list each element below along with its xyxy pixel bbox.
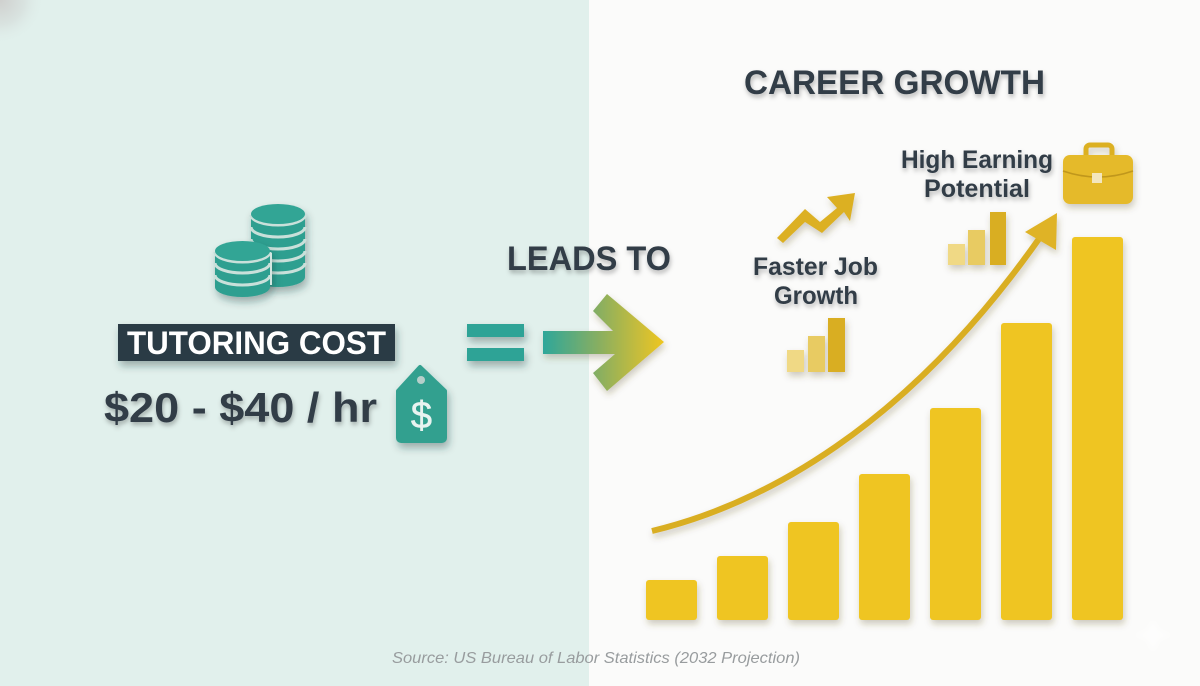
text: faster job growth — [753, 253, 878, 310]
back coin stack — [251, 204, 305, 287]
arrow: gradient — [543, 294, 664, 391]
icon: coin stacks — [215, 204, 305, 297]
text: high earning potential: Potential — [924, 175, 1030, 203]
icon: price tag: $ — [411, 395, 432, 437]
background: left panel — [0, 0, 589, 686]
front coin stack — [215, 241, 271, 297]
text: faster job growth: Faster Job — [753, 253, 878, 281]
bar chart — [646, 237, 1123, 620]
icon: small bars, high earning — [948, 212, 1006, 265]
source note: Source: US Bureau of Labor Statistics (2032 Projection) — [392, 650, 800, 667]
equals sign — [467, 324, 524, 361]
heading: leads to: LEADS TO — [507, 240, 671, 278]
arrow: growth curve — [652, 213, 1057, 531]
icon: zigzag growth arrow — [777, 193, 855, 243]
text: faster job growth: Growth — [774, 282, 858, 310]
icon: small bars, faster job growth — [787, 318, 845, 372]
sparkle mark — [1134, 620, 1172, 652]
text: high earning potential: High Earning — [901, 146, 1053, 174]
icon: briefcase — [1063, 145, 1133, 204]
icon: price tag — [398, 367, 445, 441]
label: tutoring cost: TUTORING COST — [127, 325, 386, 361]
price text: $20 - $40 / hr — [104, 384, 377, 431]
heading: career growth: CAREER GROWTH — [744, 64, 1045, 102]
text: high earning potential — [901, 146, 1053, 203]
corner shading — [0, 0, 46, 46]
